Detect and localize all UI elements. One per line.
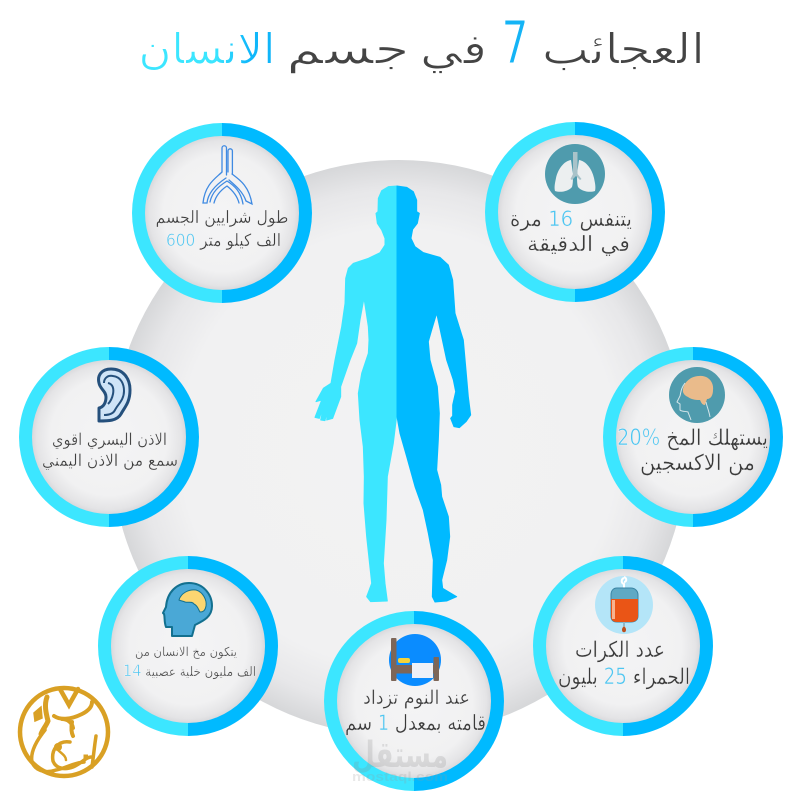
text: brain oxygen [617,426,768,476]
watermark [352,735,448,784]
text: artery length [156,208,288,251]
text: breathing: يتنفس 16 مرة [510,207,632,231]
text: brain oxygen: من الاكسجين [640,451,755,476]
background disc [111,160,687,736]
panel: breathing [485,122,665,302]
panel: red blood cells [533,556,713,736]
text: ear: سمع من الاذن اليمني [42,451,178,471]
icon: head with brain [163,583,212,636]
text: blood cells: عدد الكرات [575,638,665,663]
icon: arteries [203,146,252,204]
human body figure [315,186,471,602]
watermark: mostaql.com [352,769,448,784]
title: الانسان [138,24,276,74]
logo [20,688,108,776]
title [138,8,705,77]
text: neurons [123,644,256,680]
body left half [315,186,397,602]
watermark: مستقل [352,735,448,776]
panel: brain neurons [98,556,278,736]
text: breathing: في الدقيقة [527,232,630,256]
icon: blood bag [595,576,653,634]
text: sleep height: قامته بمعدل 1 سم [345,711,486,736]
text: neurons: يتكون مخ الانسان من [135,644,237,660]
text: artery length: طول شرايين الجسم [156,208,288,228]
text: brain oxygen: يستهلك المخ %20 [617,426,768,451]
icon: ear [99,369,130,421]
icon: lungs [545,144,605,204]
panel: brain oxygen [603,347,783,527]
text: ear: الاذن اليسري اقوي [52,430,167,450]
icon: brain in head [669,367,725,423]
text: breathing [510,207,632,256]
text: blood cells [558,638,690,690]
title: 7 [502,8,528,77]
panel: left ear [19,347,199,527]
text: sleep height: عند النوم تزداد [363,687,470,709]
text: blood cells: الحمراء 25 بليون [558,665,690,690]
panel: sleep height [324,611,504,791]
text: neurons: الف مليون خلية عصبية 14 [123,661,256,680]
text: ear [42,430,178,471]
text: artery length: الف كيلو متر 600 [166,231,281,251]
body right half [397,186,471,602]
text: sleep height [345,687,486,736]
title: جسم [286,24,410,74]
panel: artery length [132,123,312,303]
title: في [420,24,487,74]
title: العجائب [542,24,705,74]
icon: bed [389,634,441,686]
